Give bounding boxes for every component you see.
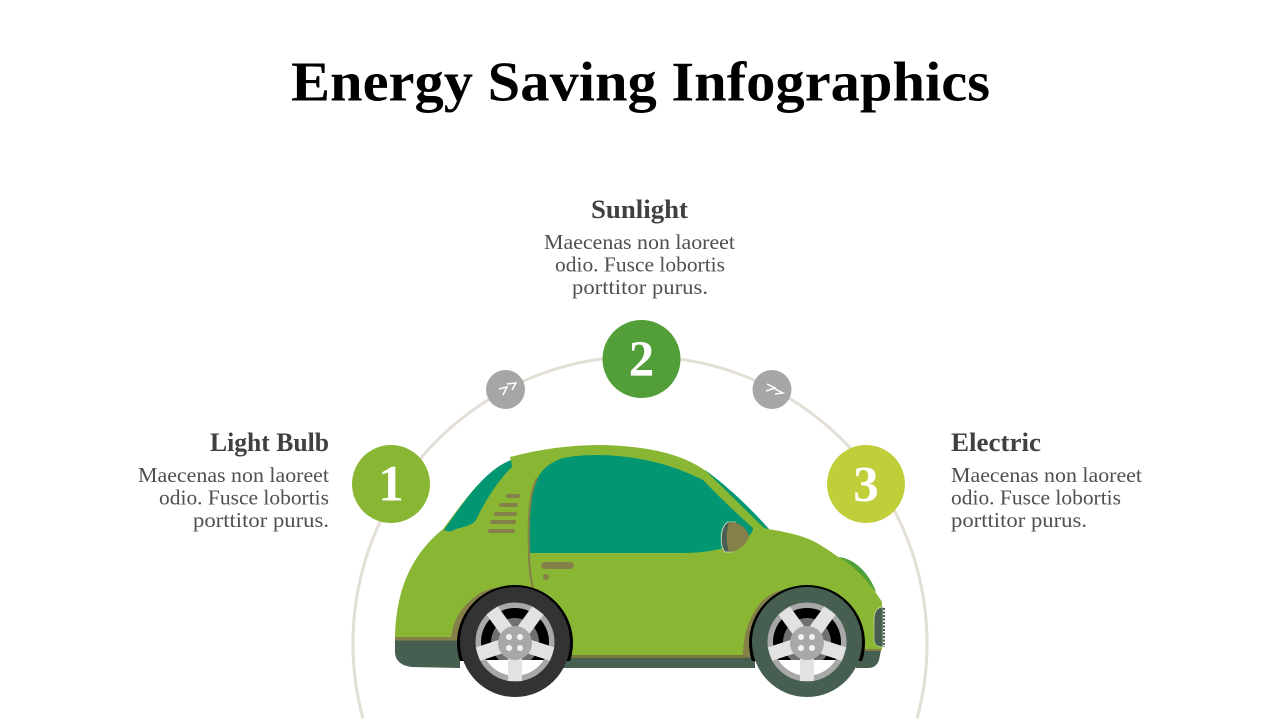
- text block: Sunlight: Maecenas non laoreet: [544, 230, 735, 254]
- text block: Sunlight: porttitor purus.: [572, 275, 708, 299]
- car body: [395, 445, 882, 660]
- rear wheel: [457, 585, 573, 701]
- door handle: [541, 562, 574, 580]
- arrow badge left: [486, 370, 525, 409]
- text block: Electric: [951, 428, 1142, 532]
- sill trim front: [858, 649, 881, 651]
- rear wheel arch: [451, 587, 520, 640]
- text block: Light Bulb: [138, 428, 329, 532]
- text block: Sunlight: odio. Fusce lobortis: [555, 252, 725, 276]
- text block: Light Bulb: porttitor purus.: [193, 508, 329, 532]
- text block: Light Bulb: odio. Fusce lobortis: [159, 486, 329, 510]
- rear window: [444, 460, 512, 531]
- text block: Light Bulb: Maecenas non laoreet: [138, 463, 329, 487]
- vent slits: [488, 494, 520, 533]
- front wheel arch: [743, 588, 810, 660]
- text block: Electric: Maecenas non laoreet: [951, 463, 1142, 487]
- badge 2: 2: [629, 332, 654, 388]
- headlight grille: [874, 607, 883, 647]
- badge 3: [827, 445, 905, 523]
- text block: Electric: odio. Fusce lobortis: [951, 486, 1121, 510]
- badge 2: [602, 320, 680, 398]
- side window: [530, 455, 753, 553]
- text block: Light Bulb: Light Bulb: [210, 428, 329, 457]
- text block: Electric: Electric: [951, 428, 1041, 457]
- side mirror: [721, 522, 749, 552]
- arrow badge right: [752, 370, 792, 409]
- text block: Sunlight: Sunlight: [591, 195, 688, 224]
- car front bumper accent: [839, 557, 876, 592]
- sill trim rear: [395, 637, 457, 640]
- sill trim middle: [560, 655, 745, 658]
- grille teeth: [883, 608, 885, 647]
- badge 3: 3: [853, 458, 879, 514]
- text block: Electric: porttitor purus.: [951, 508, 1087, 532]
- car illustration: [395, 445, 884, 701]
- badge 1: 1: [378, 456, 404, 512]
- text block: Sunlight: [544, 195, 735, 299]
- title: Energy Saving Infographics: [291, 52, 990, 114]
- door line: [529, 478, 537, 588]
- front wheel: [749, 585, 865, 701]
- badge 1: [352, 445, 430, 523]
- windshield edge: [705, 470, 769, 529]
- lower sill rear: [395, 640, 460, 668]
- lower sill middle: [560, 657, 755, 668]
- semicircular arc: [353, 356, 927, 718]
- lower sill front: [856, 650, 881, 668]
